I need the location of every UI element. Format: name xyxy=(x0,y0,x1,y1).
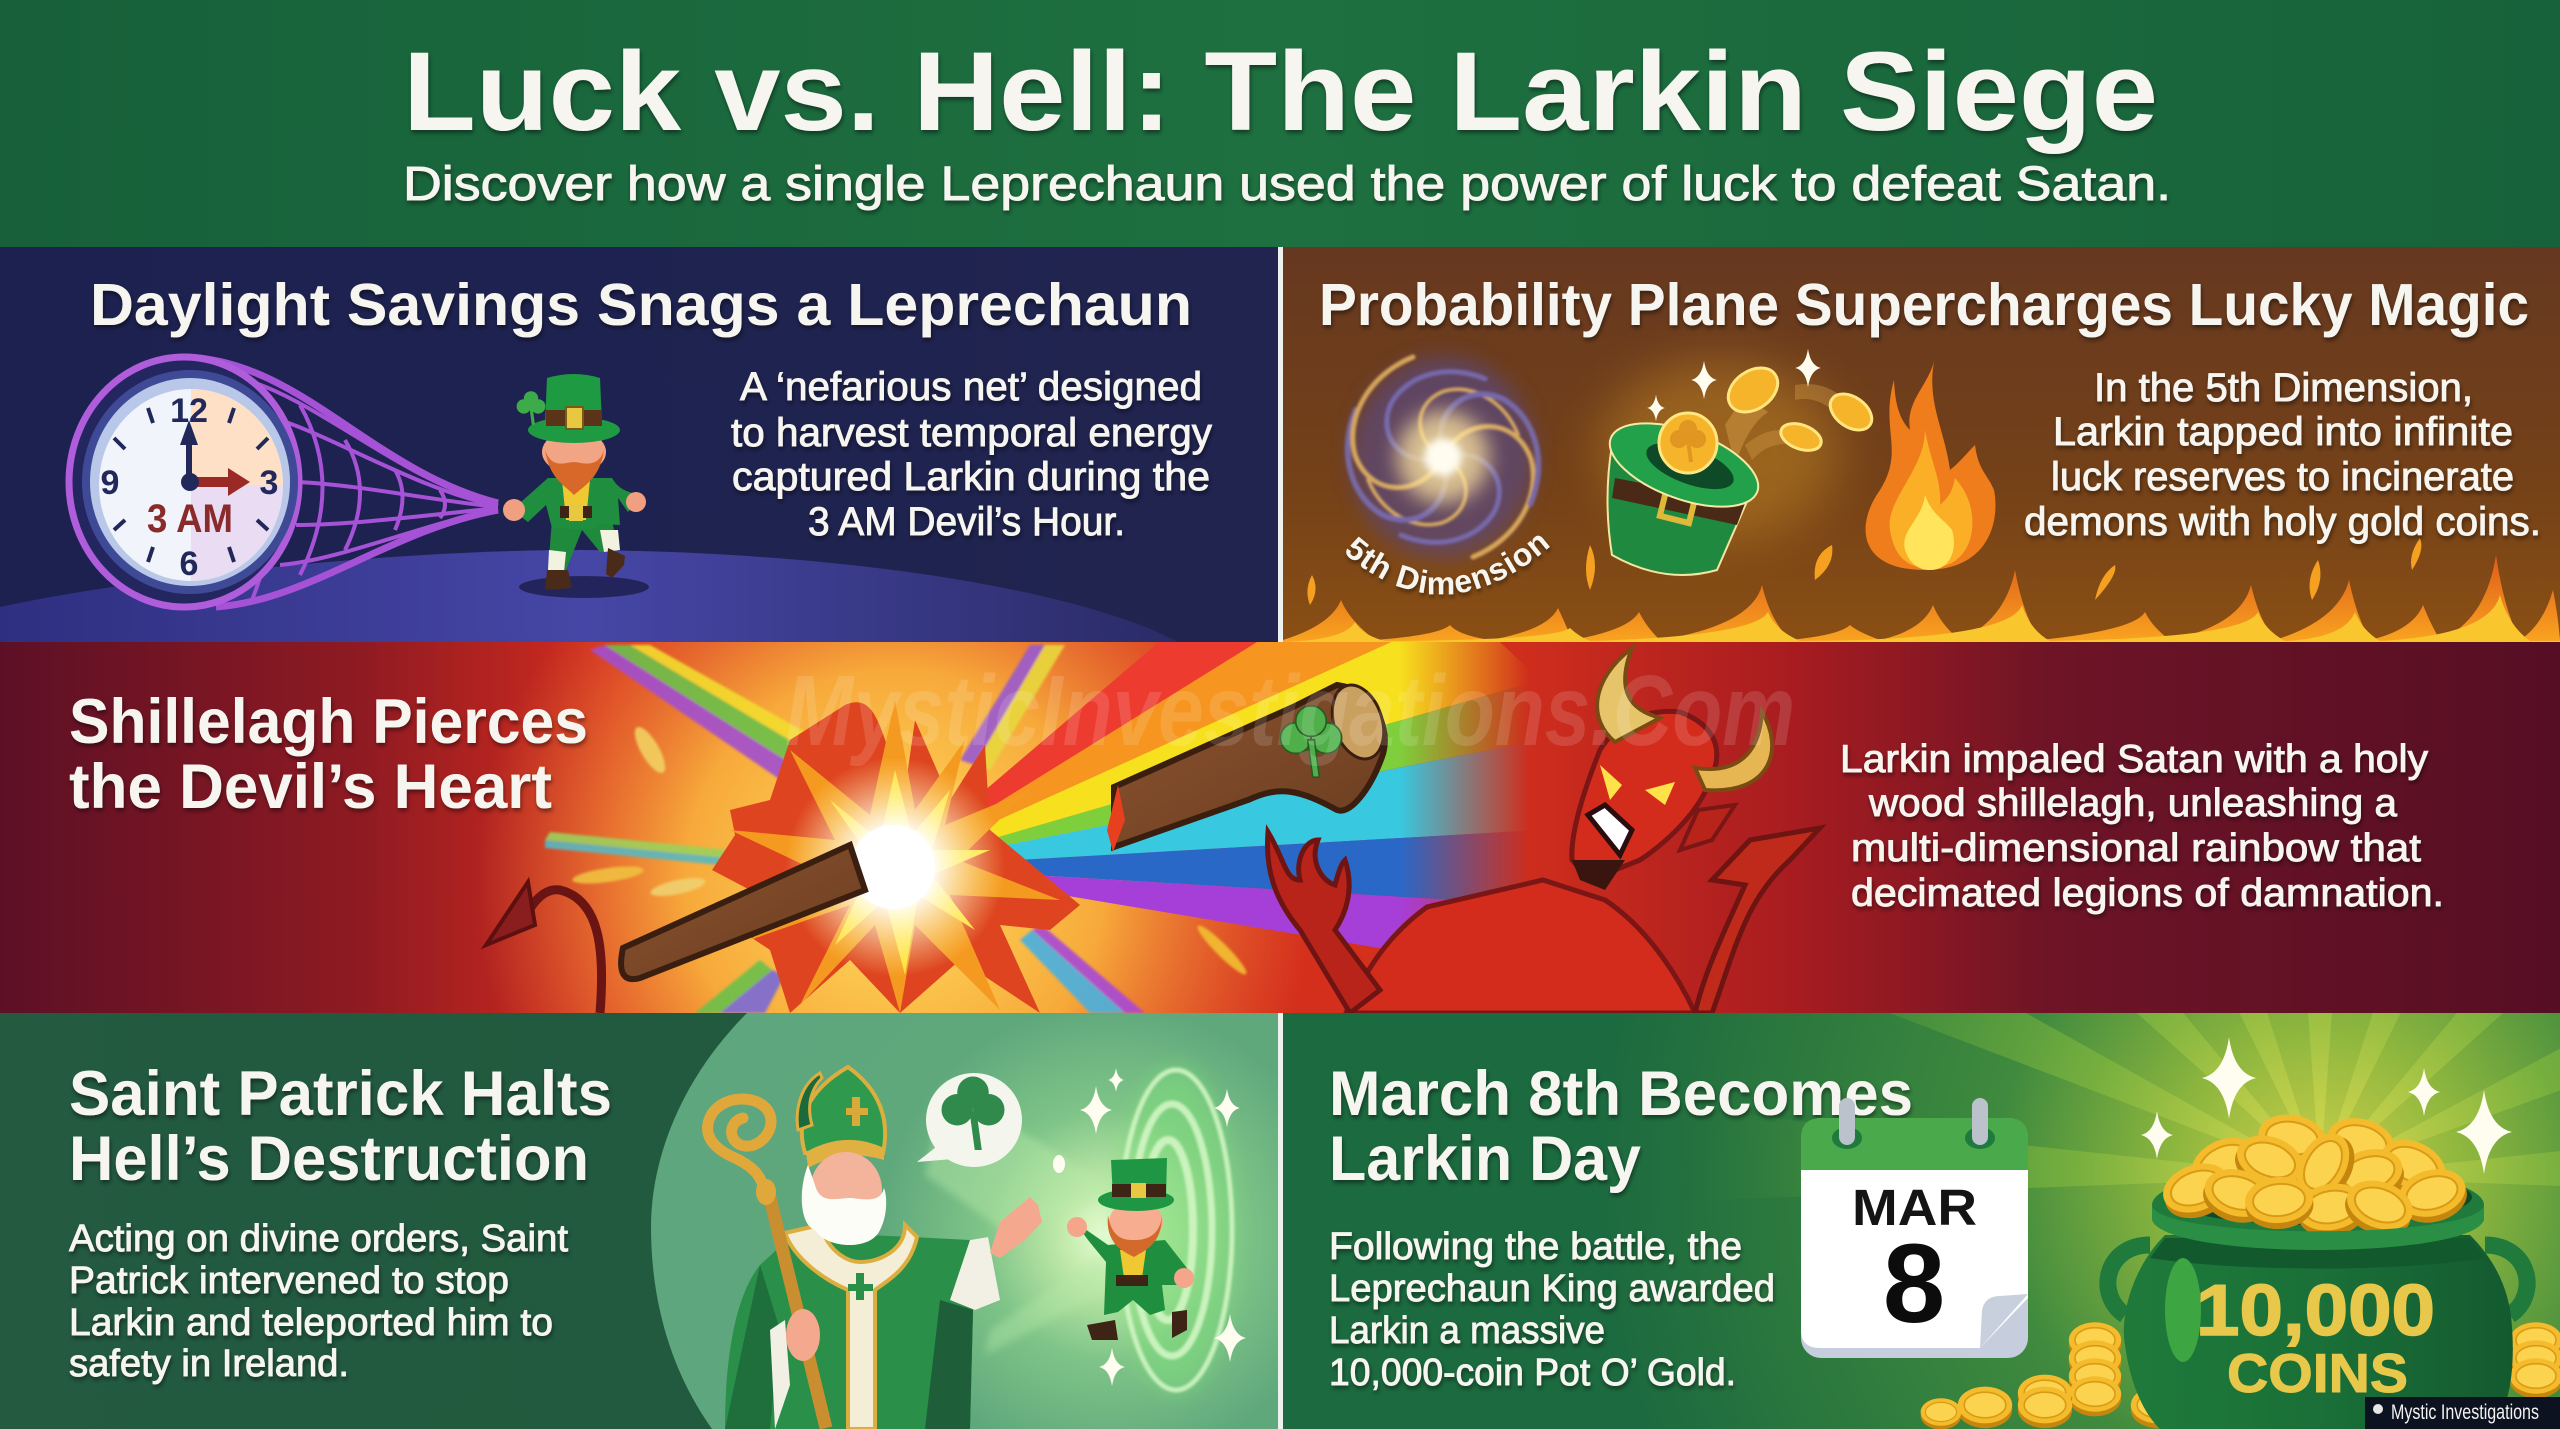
body text: Larkin impaled Satan with a holy xyxy=(1840,738,2429,781)
light beam xyxy=(925,1085,1118,1355)
icon: galaxy spiral xyxy=(1315,343,1571,571)
heading: Daylight Savings Snags a Leprechaun xyxy=(90,272,1192,338)
icon: clock with net xyxy=(69,357,498,607)
panel: daylight savings xyxy=(0,247,1278,642)
body text: wood shillelagh, unleashing a xyxy=(1868,782,2397,825)
watermark: MysticInvestigations.Com xyxy=(785,655,1795,767)
bottom flames xyxy=(1283,538,2560,642)
icon: explosion xyxy=(712,700,1080,1013)
icon: pot of gold xyxy=(2108,1109,2527,1429)
body text xyxy=(1329,1226,1775,1394)
icon: clock with net: 3 AM xyxy=(147,497,233,541)
body text xyxy=(2024,366,2541,544)
heading: Probability Plane Supercharges Lucky Magic xyxy=(1319,272,2529,338)
coins label: 10,000 xyxy=(2196,1271,2435,1351)
ground xyxy=(0,550,1178,642)
rainbow beam xyxy=(988,642,1524,948)
body text: luck reserves to incinerate xyxy=(2051,455,2514,499)
body text: demons with holy gold coins. xyxy=(2024,500,2541,544)
heading: Hell’s Destruction xyxy=(69,1124,589,1194)
body text: to harvest temporal energy xyxy=(731,411,1212,455)
coin heap xyxy=(2156,1109,2472,1244)
heading xyxy=(69,697,589,814)
body text: multi-dimensional rainbow that xyxy=(1851,827,2421,870)
icon: hat with coins xyxy=(1599,349,1878,575)
body text xyxy=(69,1218,568,1385)
heading: Larkin Day xyxy=(1329,1124,1641,1194)
icon: clock with net: 3 xyxy=(260,464,278,502)
heading: Shillelagh Pierces xyxy=(69,687,588,757)
icon: crozier xyxy=(708,1099,826,1428)
icon: leprechaun teleporting xyxy=(1067,1158,1194,1340)
body text: captured Larkin during the xyxy=(732,455,1210,499)
icon: bishop xyxy=(725,1067,1042,1429)
icon: calendar: MAR xyxy=(1852,1179,1977,1236)
icon: devil tail left xyxy=(486,882,602,1013)
heading xyxy=(69,1059,612,1194)
logo badge xyxy=(2365,1397,2560,1429)
icon: leprechaun xyxy=(503,374,649,598)
sparkles xyxy=(2141,1037,2512,1174)
panel: saint patrick xyxy=(0,1013,1278,1429)
panel: probability plane xyxy=(1283,247,2560,642)
icon: clock with net: 9 xyxy=(101,464,119,502)
sun rays xyxy=(1699,557,2560,1222)
burst streaks xyxy=(545,645,1250,1013)
body text: Following the battle, the xyxy=(1329,1226,1742,1268)
body text: safety in Ireland. xyxy=(69,1343,349,1385)
heading xyxy=(1329,1059,1913,1194)
body text: Larkin and teleported him to xyxy=(69,1302,553,1344)
arc label: 5th Dimension xyxy=(1346,536,1552,599)
body text: 10,000-coin Pot O’ Gold. xyxy=(1329,1352,1736,1394)
heading: March 8th Becomes xyxy=(1329,1059,1913,1129)
coins label: COINS xyxy=(2227,1342,2408,1404)
body text: A ‘nefarious net’ designed xyxy=(740,365,1202,409)
body text: 3 AM Devil’s Hour. xyxy=(808,500,1125,544)
coins label xyxy=(2196,1271,2435,1404)
body text: Acting on divine orders, Saint xyxy=(69,1218,568,1260)
body text xyxy=(731,365,1212,544)
title: Luck vs. Hell: The Larkin Siege xyxy=(403,29,2158,154)
panel: shillelagh xyxy=(0,642,2560,1013)
icon: clock with net: 6 xyxy=(180,545,198,583)
icon: clock with net: 12 xyxy=(170,392,208,430)
panel: larkin day xyxy=(1283,557,2560,1429)
icon: devil xyxy=(1267,648,1820,1013)
header banner xyxy=(0,0,2560,247)
body text: Patrick intervened to stop xyxy=(69,1260,509,1302)
icon: shillelagh xyxy=(621,678,1393,979)
dividers xyxy=(1278,247,1283,642)
body text: Larkin tapped into infinite xyxy=(2053,410,2513,454)
body text: Leprechaun King awarded xyxy=(1329,1268,1775,1310)
spotlight circle xyxy=(651,1013,1278,1429)
icon: calendar xyxy=(1801,1098,2028,1358)
body text xyxy=(1840,738,2444,915)
icon: fireball xyxy=(1866,357,1995,570)
icon: portal xyxy=(1053,1065,1246,1395)
icon: coin piles xyxy=(1921,1322,2560,1429)
heading: Saint Patrick Halts xyxy=(69,1059,612,1129)
heading: the Devil’s Heart xyxy=(69,752,552,822)
icon: calendar: 8 xyxy=(1883,1221,1945,1346)
body text: decimated legions of damnation. xyxy=(1851,872,2444,915)
icon: shamrock speech bubble xyxy=(917,1073,1022,1167)
subtitle: Discover how a single Leprechaun used the power of luck to defeat Satan. xyxy=(403,158,2171,211)
body text: In the 5th Dimension, xyxy=(2094,366,2473,410)
body text: Larkin a massive xyxy=(1329,1310,1605,1352)
